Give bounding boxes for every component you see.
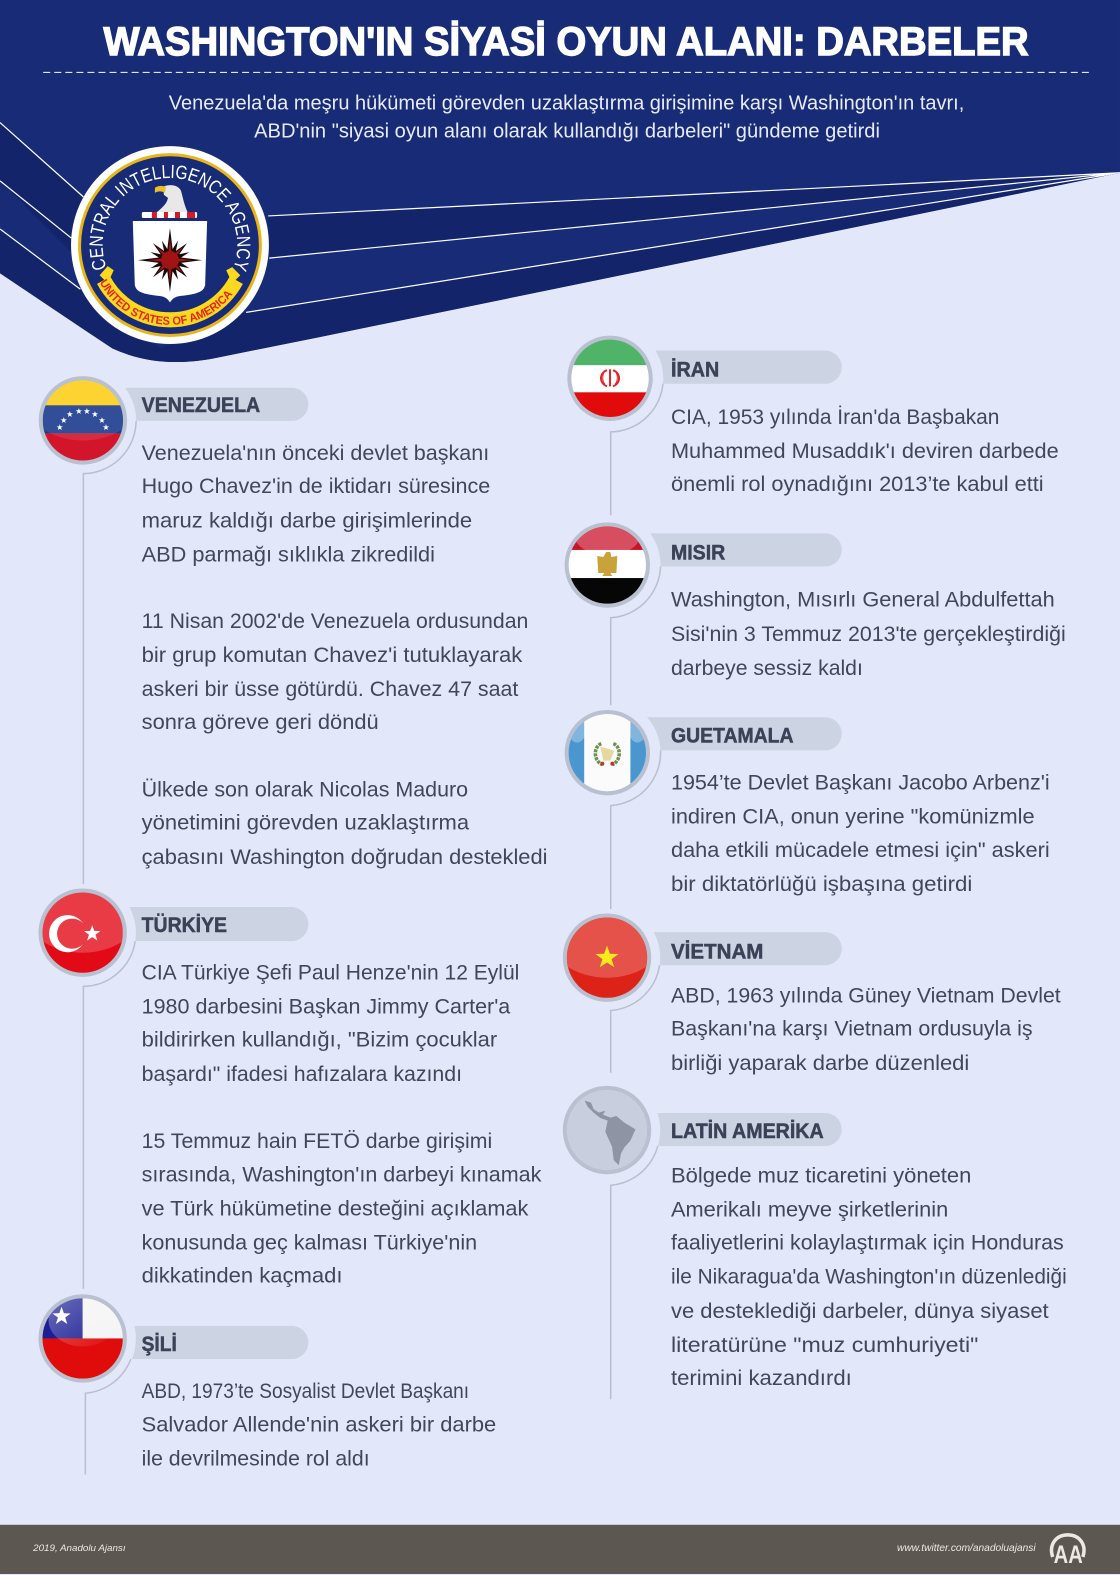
subtitle (169, 92, 964, 143)
text block: Salvador Allende'nin askeri bir darbe (142, 1411, 496, 1436)
copyright: 2019, Anadolu Ajansı (32, 1543, 126, 1554)
icon: Guatemala flag (565, 710, 650, 795)
text block: Sisi'nin 3 Temmuz 2013'te gerçekleştirdiği (671, 621, 1066, 646)
text block: bir diktatörlüğü işbaşına getirdi (671, 871, 972, 896)
text block: Başkanı'na karşı Vietnam ordusuyla iş (671, 1016, 1033, 1041)
text block: ile Nikaragua'da Washington'ın düzenlediği (671, 1264, 1067, 1289)
text block: 11 Nisan 2002'de Venezuela ordusundan (142, 608, 528, 633)
text block: 1954’te Devlet Başkanı Jacobo Arbenz'i (671, 770, 1050, 795)
icon: Anadolu Agency logo (1052, 1535, 1084, 1569)
panel: Guetamala (554, 699, 1050, 909)
icon: CIA seal (71, 146, 269, 344)
subtitle: Venezuela'da meşru hükümeti görevden uzaklaştırma girişimine karşı Washington'ın tavrı, (169, 92, 964, 114)
text block: maruz kaldığı darbe girişimlerinde (142, 507, 472, 532)
icon: Turkey flag (38, 888, 127, 977)
text block: sonra göreve geri döndü (142, 709, 379, 734)
text block (142, 1378, 496, 1471)
text block: önemli rol oynadığını 2013’te kabul etti (671, 471, 1044, 496)
text block (671, 404, 1059, 496)
panel: Şili (29, 1285, 496, 1475)
panel: Mısır (554, 512, 1066, 705)
text block: ve desteklediği darbeler, dünya siyaset (671, 1298, 1049, 1323)
text block: literatürüne "muz cumhuriyeti" (671, 1332, 978, 1357)
icon: Chile flag (38, 1294, 127, 1383)
heading: LATİN AMERİKA (671, 1120, 824, 1143)
text block: Bölgede muz ticaretini yöneten (671, 1162, 971, 1187)
text block: Hugo Chavez'in de iktidarı süresince (142, 473, 490, 498)
text block (671, 587, 1066, 680)
header banner (0, 0, 1120, 402)
icon: Vietnam flag (562, 914, 652, 1002)
text block: ile devrilmesinde rol aldı (142, 1446, 370, 1471)
icon: Venezuela flag (38, 376, 127, 465)
text block: CIA Türkiye Şefi Paul Henze'nin 12 Eylül (142, 959, 519, 984)
text block: daha etkili mücadele etmesi için" askeri (671, 837, 1050, 862)
text block: dikkatinden kaçmadı (142, 1263, 343, 1288)
footer (0, 1525, 1120, 1574)
text block: çabasını Washington doğrudan destekledi (142, 844, 547, 869)
text block: sırasında, Washington'ın darbeyi kınamak (142, 1161, 542, 1186)
text block: bir grup komutan Chavez'i tutuklayarak (142, 642, 523, 667)
text block: başardı" ifadesi hafızalara kazındı (142, 1061, 462, 1086)
panel: Venezuela (23, 350, 547, 884)
panel: Latin Amerika (554, 1077, 1067, 1399)
heading: VENEZUELA (142, 394, 260, 417)
icon: Latin America globe (563, 1086, 651, 1174)
panel: Türkiye (22, 862, 542, 1289)
text block: ABD parmağı sıklıkla zikredildi (142, 541, 435, 566)
icon: CIA seal: UNITED STATES OF AMERICA (100, 278, 232, 325)
heading: MISIR (671, 541, 725, 564)
text block: ABD, 1963 yılında Güney Vietnam Devlet (671, 982, 1061, 1007)
text block: birliği yaparak darbe düzenledi (671, 1050, 969, 1075)
panel: Vietnam (562, 914, 1060, 1074)
heading: TÜRKİYE (142, 914, 227, 937)
panel: İran (557, 325, 1059, 515)
text block: ABD, 1973’te Sosyalist Devlet Başkanı (142, 1378, 469, 1403)
icon: Iran flag (567, 336, 653, 421)
text block (142, 959, 542, 1288)
social link: www.twitter.com/anadoluajansi (897, 1543, 1036, 1554)
text block (671, 982, 1061, 1075)
text block: indiren CIA, onun yerine "komünizmle (671, 804, 1035, 829)
heading: İRAN (671, 359, 719, 382)
text block: 15 Temmuz hain FETÖ darbe girişimi (142, 1128, 492, 1153)
icon: Anadolu Agency logo: AA (1054, 1541, 1083, 1569)
text block: terimini kazandırdı (671, 1365, 852, 1390)
text block: bildirirken kullandığı, "Bizim çocuklar (142, 1027, 497, 1052)
text block: faaliyetlerini kolaylaştırmak için Honduras (671, 1230, 1064, 1255)
text block: Muhammed Musaddık'ı deviren darbede (671, 438, 1059, 463)
heading: VİETNAM (671, 940, 763, 963)
text block: askeri bir üsse götürdü. Chavez 47 saat (142, 676, 518, 701)
text block: 1980 darbesini Başkan Jimmy Carter'a (142, 994, 510, 1019)
text block: ve Türk hükümetine desteğini açıklamak (142, 1195, 529, 1220)
icon: Egypt flag (565, 519, 650, 608)
text block (671, 1162, 1067, 1390)
text block (142, 440, 547, 869)
icon: CIA seal: CENTRAL INTELLIGENCE AGENCY (89, 164, 250, 272)
text block: CIA, 1953 yılında İran'da Başbakan (671, 404, 999, 429)
text block (671, 770, 1050, 896)
text block: darbeye sessiz kaldı (671, 655, 863, 680)
text block: Ülkede son olarak Nicolas Maduro (142, 777, 468, 802)
heading: GUETAMALA (671, 724, 794, 747)
subtitle: ABD'nin "siyasi oyun alanı olarak kullandığı darbeleri" gündeme getirdi (254, 121, 880, 143)
text block: konusunda geç kalması Türkiye'nin (142, 1230, 477, 1255)
heading: ŞİLİ (142, 1333, 177, 1356)
text block: Venezuela'nın önceki devlet başkanı (142, 440, 489, 465)
text block: Washington, Mısırlı General Abdulfettah (671, 587, 1055, 612)
text block: yönetimini görevden uzaklaştırma (142, 810, 469, 835)
text block: Amerikalı meyve şirketlerinin (671, 1196, 948, 1221)
title: WASHINGTON'IN SİYASİ OYUN ALANI: DARBELER (103, 19, 1029, 64)
